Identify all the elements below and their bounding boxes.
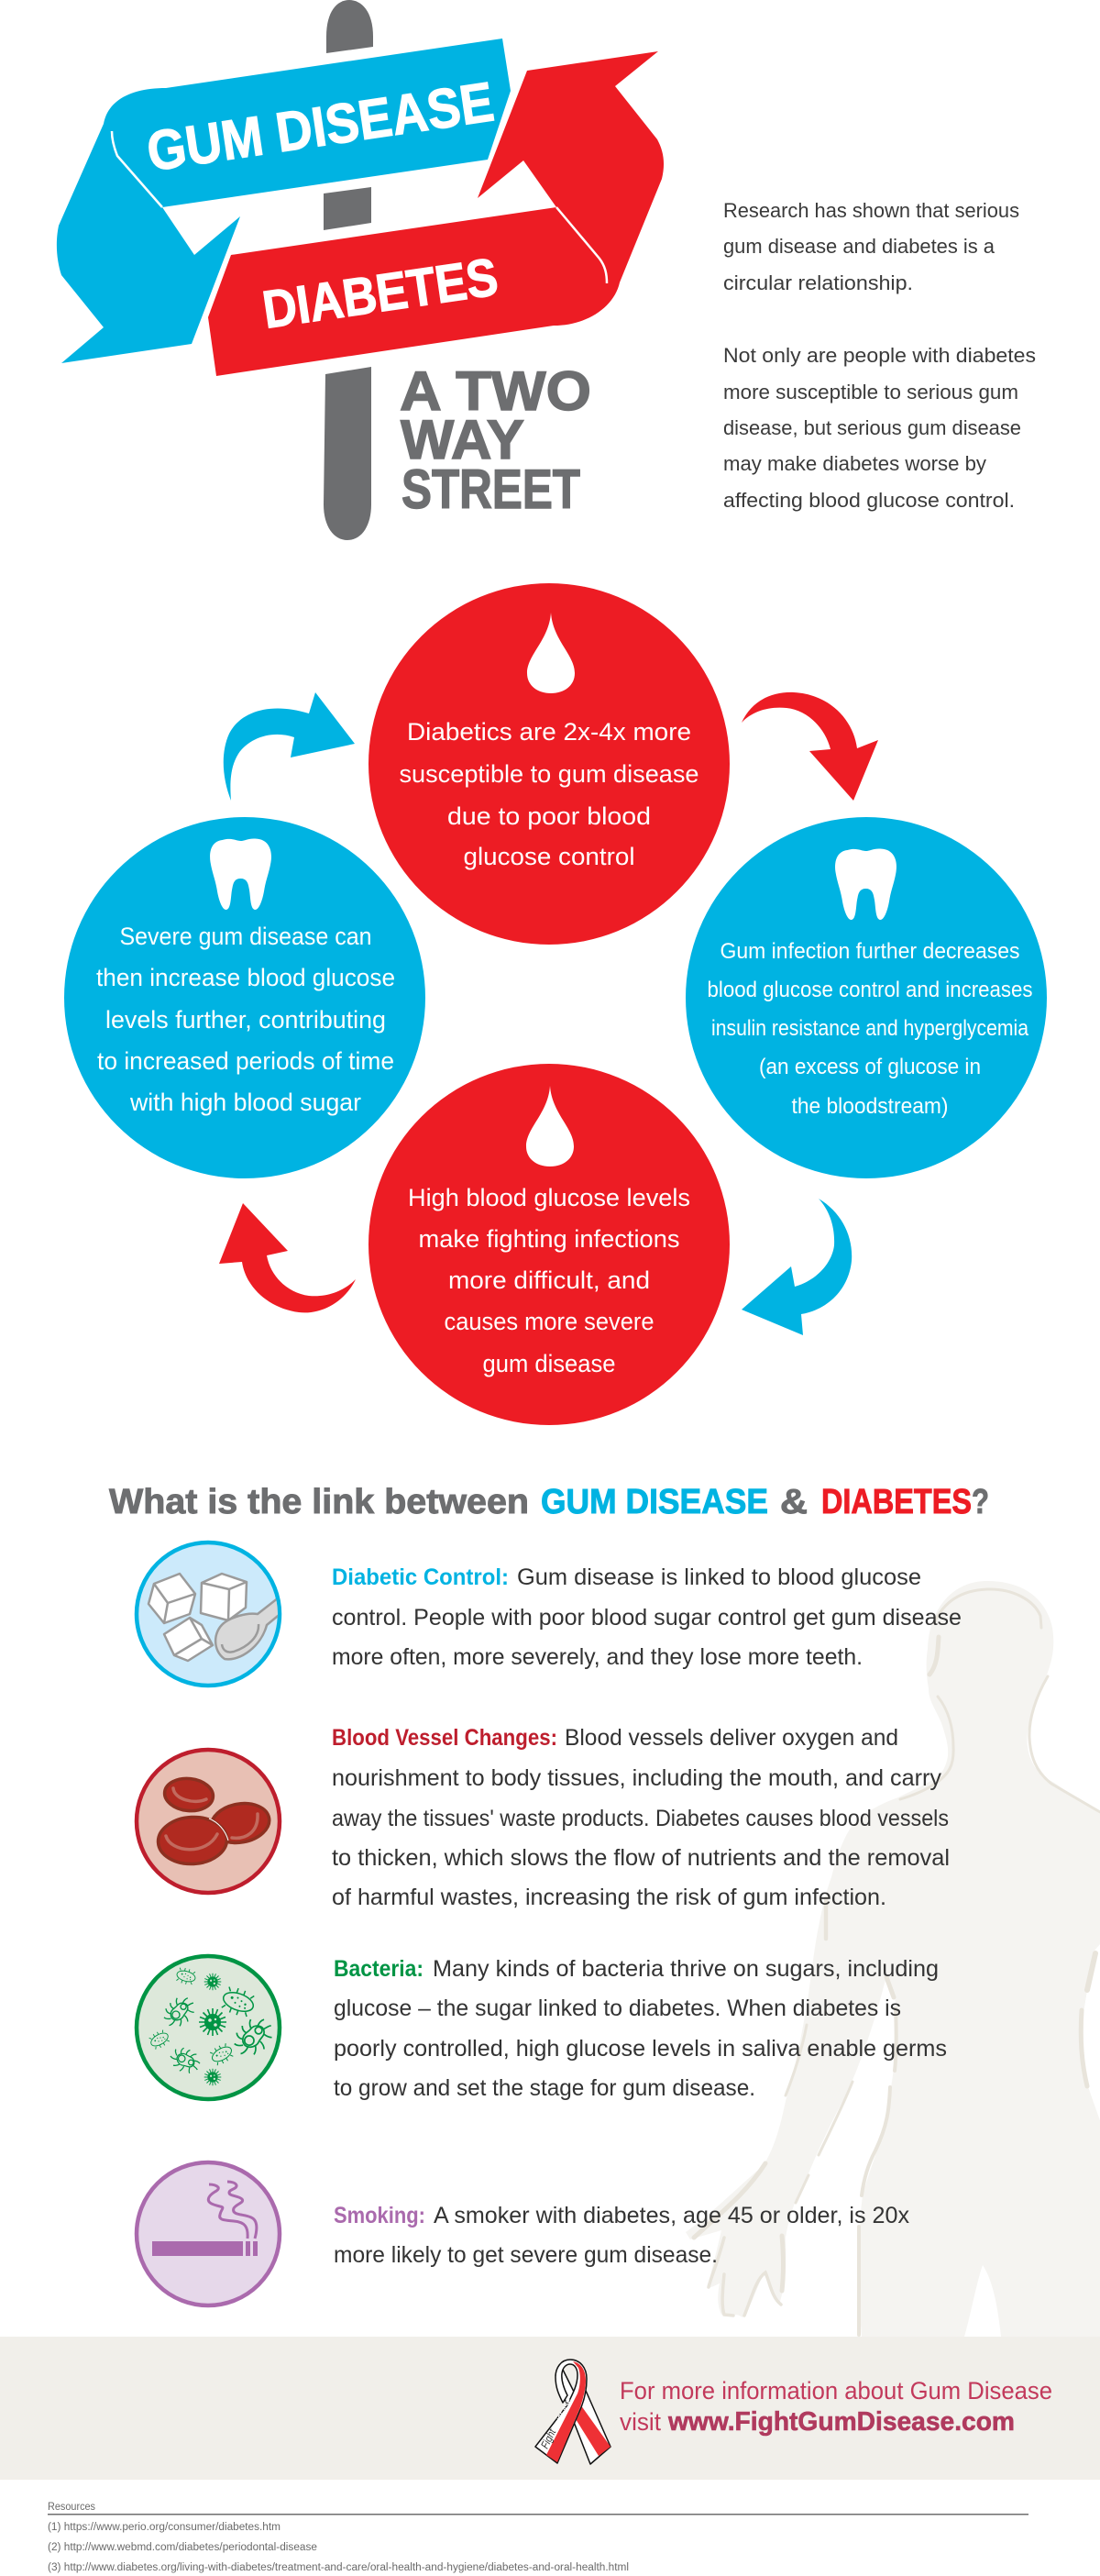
text: smoking: Smoking: bbox=[334, 2203, 425, 2228]
intro text: Research has shown that serious bbox=[723, 199, 1019, 222]
sign pole bbox=[324, 0, 373, 540]
icon: awareness ribbon: GUM DISEASE bbox=[546, 2396, 574, 2442]
circle: high blood glucose: more difficult, and bbox=[448, 1266, 650, 1294]
body silhouette background bbox=[686, 1581, 1100, 2337]
resources: (1) https://www.perio.org/consumer/diabetes.htm bbox=[48, 2522, 280, 2533]
callout: more information: visit bbox=[620, 2408, 661, 2436]
sign label: diabetes: DIABETES bbox=[258, 247, 501, 340]
text: smoking: more likely to get severe gum disease. bbox=[334, 2242, 718, 2268]
icon: cigarette bbox=[137, 2162, 280, 2305]
circle: diabetics susceptible: susceptible to gum disease bbox=[400, 760, 698, 788]
text: blood vessel changes: of harmful wastes, increasing the risk of gum infection. bbox=[332, 1885, 886, 1910]
intro text: affecting blood glucose control. bbox=[723, 489, 1015, 512]
circle: severe gum disease: with high blood sugar bbox=[129, 1089, 361, 1116]
intro text: circular relationship. bbox=[723, 271, 913, 294]
intro text: may make diabetes worse by bbox=[723, 452, 987, 475]
intro text: Not only are people with diabetes bbox=[723, 344, 1036, 367]
circle: diabetics susceptible: Diabetics are 2x-4x more bbox=[407, 718, 691, 746]
footer band bbox=[0, 2337, 1100, 2480]
circle: diabetics susceptible: due to poor blood bbox=[447, 802, 651, 830]
title: a two way street: WAY bbox=[401, 409, 524, 470]
text: bacteria: to grow and set the stage for gum disease. bbox=[334, 2075, 755, 2101]
intro text: gum disease and diabetes is a bbox=[723, 235, 995, 258]
intro text: more susceptible to serious gum bbox=[723, 381, 1018, 404]
text: bacteria bbox=[334, 1956, 947, 2101]
callout: more information: For more information about Gum Disease bbox=[620, 2377, 1052, 2405]
text: blood vessel changes: to thicken, which slows the flow of nutrients and the removal bbox=[332, 1845, 950, 1871]
heading: what is the link bbox=[109, 1483, 989, 1521]
icon: bacteria bbox=[137, 1956, 280, 2099]
circle: gum infection bbox=[686, 817, 1047, 1178]
arrow: blue bottom-right bbox=[742, 1199, 852, 1335]
circle: gum infection: (an excess of glucose in bbox=[759, 1055, 981, 1079]
text: diabetic control: Diabetic Control: bbox=[332, 1564, 509, 1590]
circle: high blood glucose bbox=[368, 1064, 730, 1425]
callout: more information bbox=[620, 2377, 1052, 2437]
text: blood vessel changes bbox=[332, 1725, 950, 1910]
cycle diagram bbox=[64, 583, 1047, 1425]
signpost illustration bbox=[57, 0, 664, 540]
intro text bbox=[723, 199, 1036, 512]
text: blood vessel changes: nourishment to body tissues, including the mouth, and carry bbox=[332, 1765, 941, 1791]
resources bbox=[48, 2502, 1028, 2573]
text: blood vessel changes: Blood Vessel Changes: bbox=[332, 1725, 557, 1751]
circle: gum infection: the bloodstream) bbox=[792, 1094, 948, 1119]
text: blood vessel changes: away the tissues' waste products. Diabetes causes blood vessels bbox=[332, 1806, 949, 1831]
intro text: disease, but serious gum disease bbox=[723, 416, 1021, 439]
text: bacteria: Bacteria: bbox=[334, 1956, 424, 1982]
title: a two way street: A TWO bbox=[400, 360, 591, 422]
heading: what is the link: ? bbox=[972, 1483, 989, 1521]
text: smoking: A smoker with diabetes, age 45 or older, is 20x bbox=[434, 2203, 909, 2228]
heading: what is the link: What is the link between bbox=[109, 1483, 529, 1521]
sign label: gum disease: GUM DISEASE bbox=[143, 70, 498, 182]
circle: gum infection: Gum infection further decreases bbox=[720, 939, 1019, 964]
text: diabetic control bbox=[332, 1564, 962, 1670]
circle: severe gum disease bbox=[64, 817, 425, 1178]
text: diabetic control: Gum disease is linked to blood glucose bbox=[517, 1564, 921, 1590]
arrow: red top-right bbox=[742, 692, 878, 801]
circle: gum infection: blood glucose control and increases bbox=[708, 978, 1032, 1002]
title: a two way street bbox=[400, 360, 591, 520]
arrow: blue top-left bbox=[224, 692, 355, 801]
red sign arrow: diabetes bbox=[208, 51, 664, 376]
circle: severe gum disease: then increase blood glucose bbox=[96, 964, 395, 991]
text: bacteria: Many kinds of bacteria thrive on sugars, including bbox=[433, 1956, 939, 1982]
heading: what is the link: DIABETES bbox=[821, 1483, 972, 1521]
icon: awareness ribbon: Fight bbox=[538, 2427, 559, 2450]
heading: what is the link: & bbox=[780, 1483, 808, 1521]
text: bacteria: poorly controlled, high glucose levels in saliva enable germs bbox=[334, 2036, 947, 2062]
circle: high blood glucose: High blood glucose levels bbox=[408, 1184, 690, 1211]
circle: severe gum disease: to increased periods of time bbox=[97, 1047, 394, 1075]
circle: diabetics susceptible bbox=[368, 583, 730, 945]
circle: severe gum disease: Severe gum disease can bbox=[119, 923, 372, 950]
circle: diabetics susceptible: glucose control bbox=[464, 843, 634, 870]
circle: high blood glucose: gum disease bbox=[482, 1350, 616, 1377]
text: blood vessel changes: Blood vessels deliver oxygen and bbox=[565, 1725, 898, 1751]
icon: sugar cubes and spoon bbox=[137, 1542, 282, 1686]
circle: high blood glucose: causes more severe bbox=[444, 1308, 654, 1335]
icon: awareness ribbon bbox=[535, 2360, 610, 2464]
heading: what is the link: GUM DISEASE bbox=[541, 1483, 768, 1521]
blue sign arrow: gum disease bbox=[57, 39, 511, 363]
text: smoking bbox=[334, 2203, 909, 2268]
circle: high blood glucose: make fighting infections bbox=[418, 1225, 680, 1253]
text: bacteria: glucose – the sugar linked to diabetes. When diabetes is bbox=[334, 1996, 901, 2021]
arrow: red bottom-left bbox=[219, 1203, 356, 1312]
resources: Resources bbox=[48, 2502, 95, 2513]
callout: more information: www.FightGumDisease.com bbox=[667, 2407, 1015, 2437]
icon: blood cells bbox=[137, 1750, 280, 1893]
text: diabetic control: control. People with poor blood sugar control get gum disease bbox=[332, 1605, 962, 1631]
resources: (2) http://www.webmd.com/diabetes/periodontal-disease bbox=[48, 2542, 317, 2553]
text: diabetic control: more often, more severely, and they lose more teeth. bbox=[332, 1644, 863, 1670]
circle: gum infection: insulin resistance and hyperglycemia bbox=[711, 1016, 1029, 1041]
resources: (3) http://www.diabetes.org/living-with-diabetes/treatment-and-care/oral-health-and-hygiene/diabetes-and-oral-health.html bbox=[48, 2562, 629, 2573]
circle: severe gum disease: levels further, contributing bbox=[105, 1006, 386, 1034]
title: a two way street: STREET bbox=[402, 459, 580, 520]
